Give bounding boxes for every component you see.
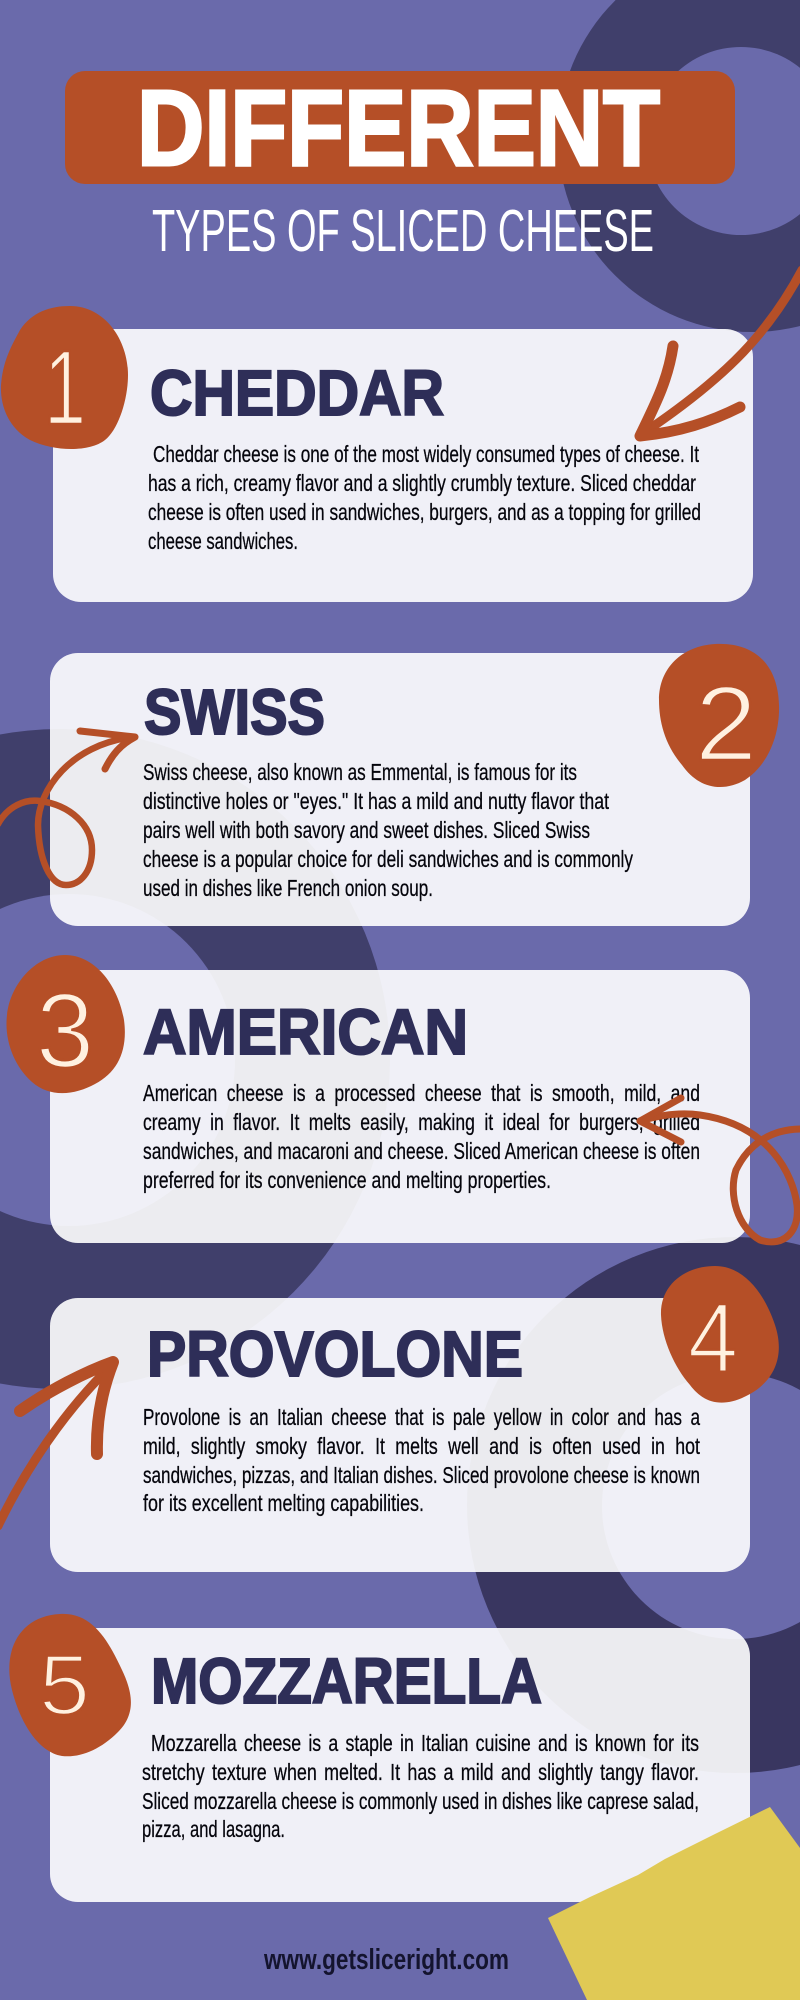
text: provolone description: [143, 1404, 700, 1516]
number badge 5: [9, 1614, 131, 1756]
arrow: pointing to cheddar: [640, 270, 800, 436]
text: swiss description: distinctive holes or "eyes." It has a mild and nutty flavor that: [143, 788, 609, 814]
cheese slice: [548, 1807, 800, 2000]
heading: cheddar: CHEDDAR: [150, 357, 444, 429]
number badge 3: 3: [36, 972, 94, 1090]
text: provolone description: for its excellent melting capabilities.: [143, 1490, 424, 1516]
heading: american: AMERICAN: [143, 996, 468, 1068]
panel: cheddar: [1, 306, 753, 602]
text: american description: [143, 1080, 700, 1193]
panel: swiss: [50, 644, 779, 926]
arrow: pointing to swiss: [0, 731, 135, 885]
panel: american: [6, 955, 750, 1243]
heading: swiss: SWISS: [144, 676, 325, 748]
text: swiss description: used in dishes like French onion soup.: [143, 875, 433, 901]
number badge 2: [659, 644, 779, 787]
text: cheddar description: cheese sandwiches.: [148, 528, 298, 554]
text: swiss description: [143, 759, 633, 901]
text: cheddar description: [148, 441, 701, 554]
heading: mozzarella: MOZZARELLA: [151, 1645, 542, 1717]
number badge 4: [661, 1266, 779, 1403]
text: american description: preferred for its convenience and melting properties.: [143, 1167, 551, 1193]
text: mozzarella description: pizza, and lasagna.: [142, 1816, 285, 1842]
panel: mozzarella: [9, 1614, 750, 1902]
background circle ring: bottom right: [467, 1237, 800, 1773]
number badge 1: 1: [44, 329, 86, 447]
panel: provolone: [50, 1266, 779, 1572]
arrow: pointing to american: [640, 1098, 800, 1242]
website url: www.getsliceright.com: [263, 1944, 509, 1976]
text: swiss description: pairs well with both savory and sweet dishes. Sliced Swiss: [143, 817, 590, 843]
number badge 2: 2: [695, 665, 757, 783]
title banner: DIFFERENT: [137, 67, 660, 188]
arrow: pointing to provolone: [0, 1362, 113, 1526]
number badge 4: 4: [688, 1283, 738, 1393]
number badge 1: [1, 306, 128, 449]
text: swiss description: cheese is a popular choice for deli sandwiches and is commonly: [143, 846, 633, 872]
heading: provolone: PROVOLONE: [147, 1318, 523, 1390]
text: swiss description: Swiss cheese, also known as Emmental, is famous for its: [143, 759, 577, 785]
number badge 5: 5: [39, 1638, 90, 1733]
text: mozzarella description: [142, 1730, 699, 1842]
number badge 3: [6, 955, 125, 1093]
background circle ring: middle left: [0, 729, 390, 1389]
background circle ring: top right: [558, 0, 800, 332]
